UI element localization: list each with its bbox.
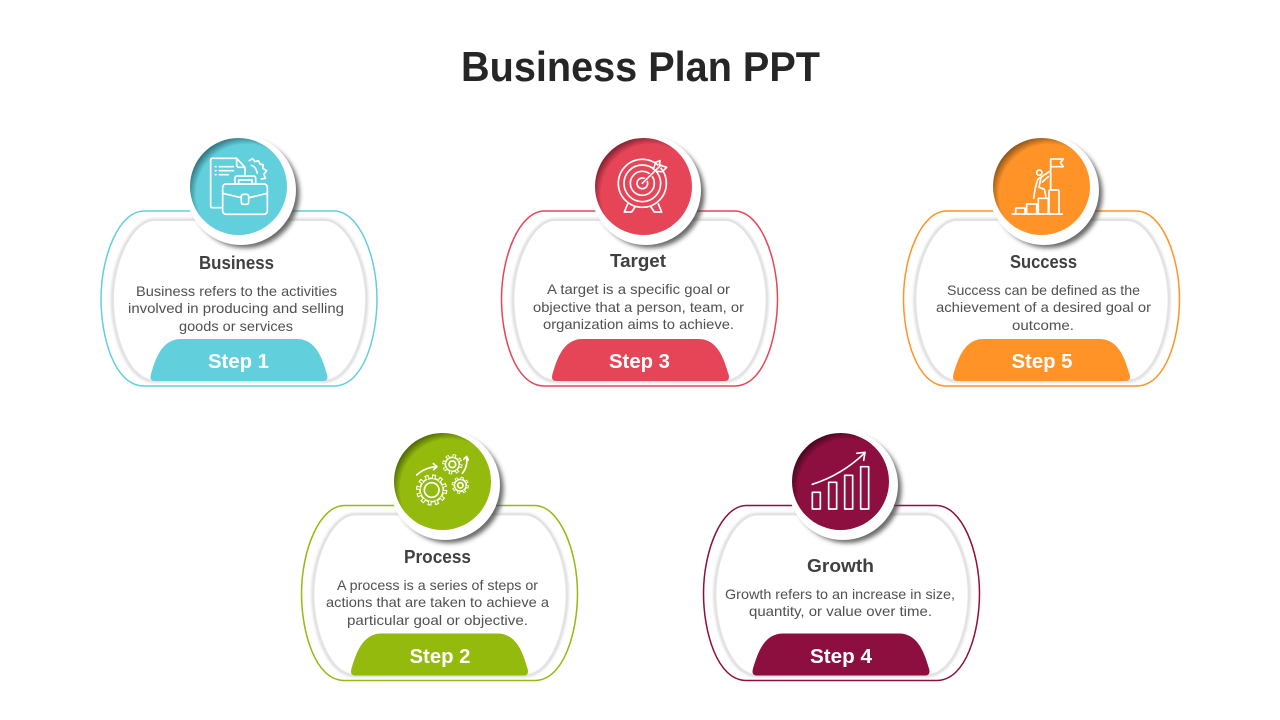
- heading: growth: Growth: [807, 556, 874, 576]
- heading: target: Target: [610, 251, 666, 271]
- step tab: 4: [752, 634, 930, 676]
- description: success: outcome.: [1012, 317, 1074, 333]
- card outline: business: [101, 211, 377, 386]
- badge: target: [591, 135, 704, 248]
- inner card: target: [513, 220, 767, 381]
- inner card: business: [112, 220, 366, 381]
- description: business: [128, 283, 344, 334]
- heading: business: Business: [199, 253, 274, 273]
- description: success: Success can be defined as the: [947, 282, 1140, 298]
- icon: gears with arrows: [417, 456, 468, 503]
- step tab: 1: Step 1: [208, 350, 269, 373]
- description: growth: [725, 586, 955, 619]
- description: business: involved in producing and selling: [128, 300, 344, 316]
- description: target: organization aims to achieve.: [543, 316, 734, 332]
- inner card: process: [313, 514, 567, 676]
- card outline: growth: [704, 506, 980, 680]
- panel: growth step 4: [704, 430, 980, 680]
- title: Business Plan PPT: [461, 43, 820, 90]
- step tab: 3: [552, 339, 729, 381]
- step tab: 3: Step 3: [609, 350, 670, 373]
- badge: growth: [788, 430, 902, 543]
- description: process: particular goal or objective.: [347, 612, 528, 628]
- description: business: goods or services: [179, 318, 293, 334]
- inner card: growth: [715, 514, 969, 676]
- step tab: 1: [150, 339, 328, 381]
- card outline: process: [302, 506, 578, 680]
- inner card: success: [915, 220, 1169, 381]
- icon: target with arrow: [618, 159, 667, 212]
- icon: rising bar chart: [812, 452, 869, 509]
- step tab: 5: [953, 339, 1130, 381]
- icon: document, gear and briefcase: [211, 158, 267, 214]
- step tab: 2: [351, 634, 528, 676]
- badge: process: [390, 430, 504, 543]
- description: target: [533, 281, 744, 332]
- panel: success step 5: [904, 135, 1180, 386]
- heading: process: Process: [404, 547, 471, 567]
- card outline: target: [502, 211, 778, 386]
- panel: process step 2: [302, 430, 578, 680]
- description: growth: quantity, or value over time.: [749, 603, 932, 619]
- description: success: achievement of a desired goal or: [936, 299, 1151, 315]
- step tab: 2: Step 2: [410, 645, 470, 668]
- badge: success: [989, 135, 1102, 248]
- description: target: A target is a specific goal or: [547, 281, 730, 297]
- step tab: 4: Step 4: [810, 645, 873, 668]
- description: process: A process is a series of steps or: [337, 577, 538, 593]
- icon: climber on steps with flag: [1012, 159, 1063, 214]
- description: business: Business refers to the activities: [136, 283, 337, 299]
- panel: business step 1: [101, 135, 377, 386]
- panel: target step 3: [502, 135, 778, 386]
- step tab: 5: Step 5: [1012, 350, 1072, 373]
- heading: success: Success: [1010, 252, 1077, 272]
- description: growth: Growth refers to an increase in size,: [725, 586, 955, 602]
- description: success: [936, 282, 1151, 333]
- description: process: [326, 577, 549, 628]
- description: process: actions that are taken to achieve a: [326, 594, 549, 610]
- card outline: success: [904, 211, 1180, 386]
- badge: business: [186, 135, 300, 248]
- description: target: objective that a person, team, or: [533, 299, 744, 315]
